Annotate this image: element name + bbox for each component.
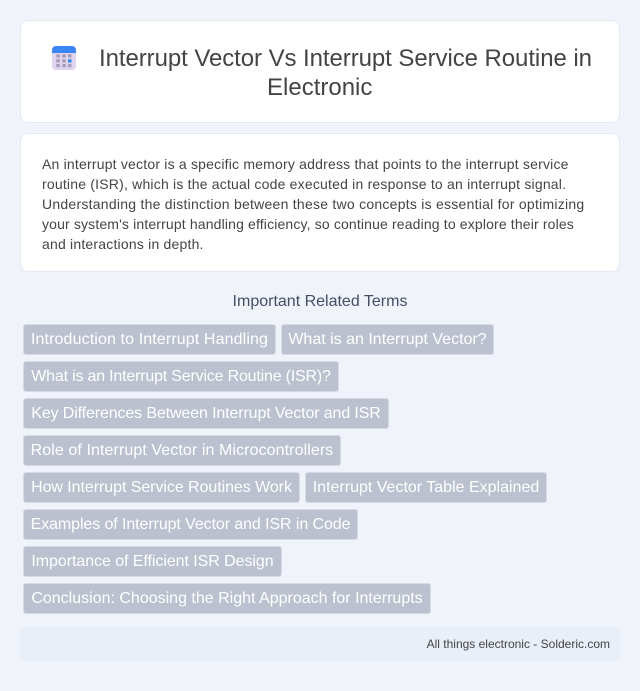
tag [23,472,300,503]
text block: introduction: An interrupt vector is a specific memory address that points to the interrupt service [42,156,569,172]
tag: Importance of Efficient ISR Design [31,553,274,570]
text block: introduction [42,156,584,252]
footer credit: All things electronic - Solderic.com [427,637,610,651]
panel: title card [20,20,620,123]
title: Interrupt Vector Vs Interrupt Service Routine in [99,45,592,72]
footer bar [20,627,620,661]
tag [23,324,276,355]
tag: Role of Interrupt Vector in Microcontrollers [31,442,333,459]
tag [23,583,431,614]
heading: important related terms: Important Related Terms [233,293,407,310]
tag [23,546,282,577]
tag: Key Differences Between Interrupt Vector and ISR [31,405,381,422]
text block: introduction: routine (ISR), which is the actual code executed in response to an interrupt signal. [42,176,566,192]
text block: introduction: and interactions in depth. [42,236,204,252]
tag: What is an Interrupt Vector? [288,331,487,348]
tag [23,361,339,392]
panel: intro text card [20,133,620,272]
tag [305,472,547,503]
tag: How Interrupt Service Routines Work [31,479,292,496]
tag: Examples of Interrupt Vector and ISR in Code [31,516,350,533]
title [99,45,592,101]
title: Electronic [267,74,372,101]
tag: Introduction to Interrupt Handling [31,331,268,348]
text block: introduction: your system's interrupt handling efficiency, so continue reading to explore their roles [42,216,574,232]
tag [23,398,389,429]
tag: What is an Interrupt Service Routine (ISR)? [31,368,331,385]
icon: calendar grid [52,46,76,70]
text block: introduction: Understanding the distinction between these two concepts is essential for optimizing [42,196,584,212]
tag [23,435,341,466]
tag: Conclusion: Choosing the Right Approach for Interrupts [31,590,423,607]
tag list [23,324,547,614]
tag [23,509,358,540]
tag [281,324,494,355]
tag: Interrupt Vector Table Explained [313,479,539,496]
